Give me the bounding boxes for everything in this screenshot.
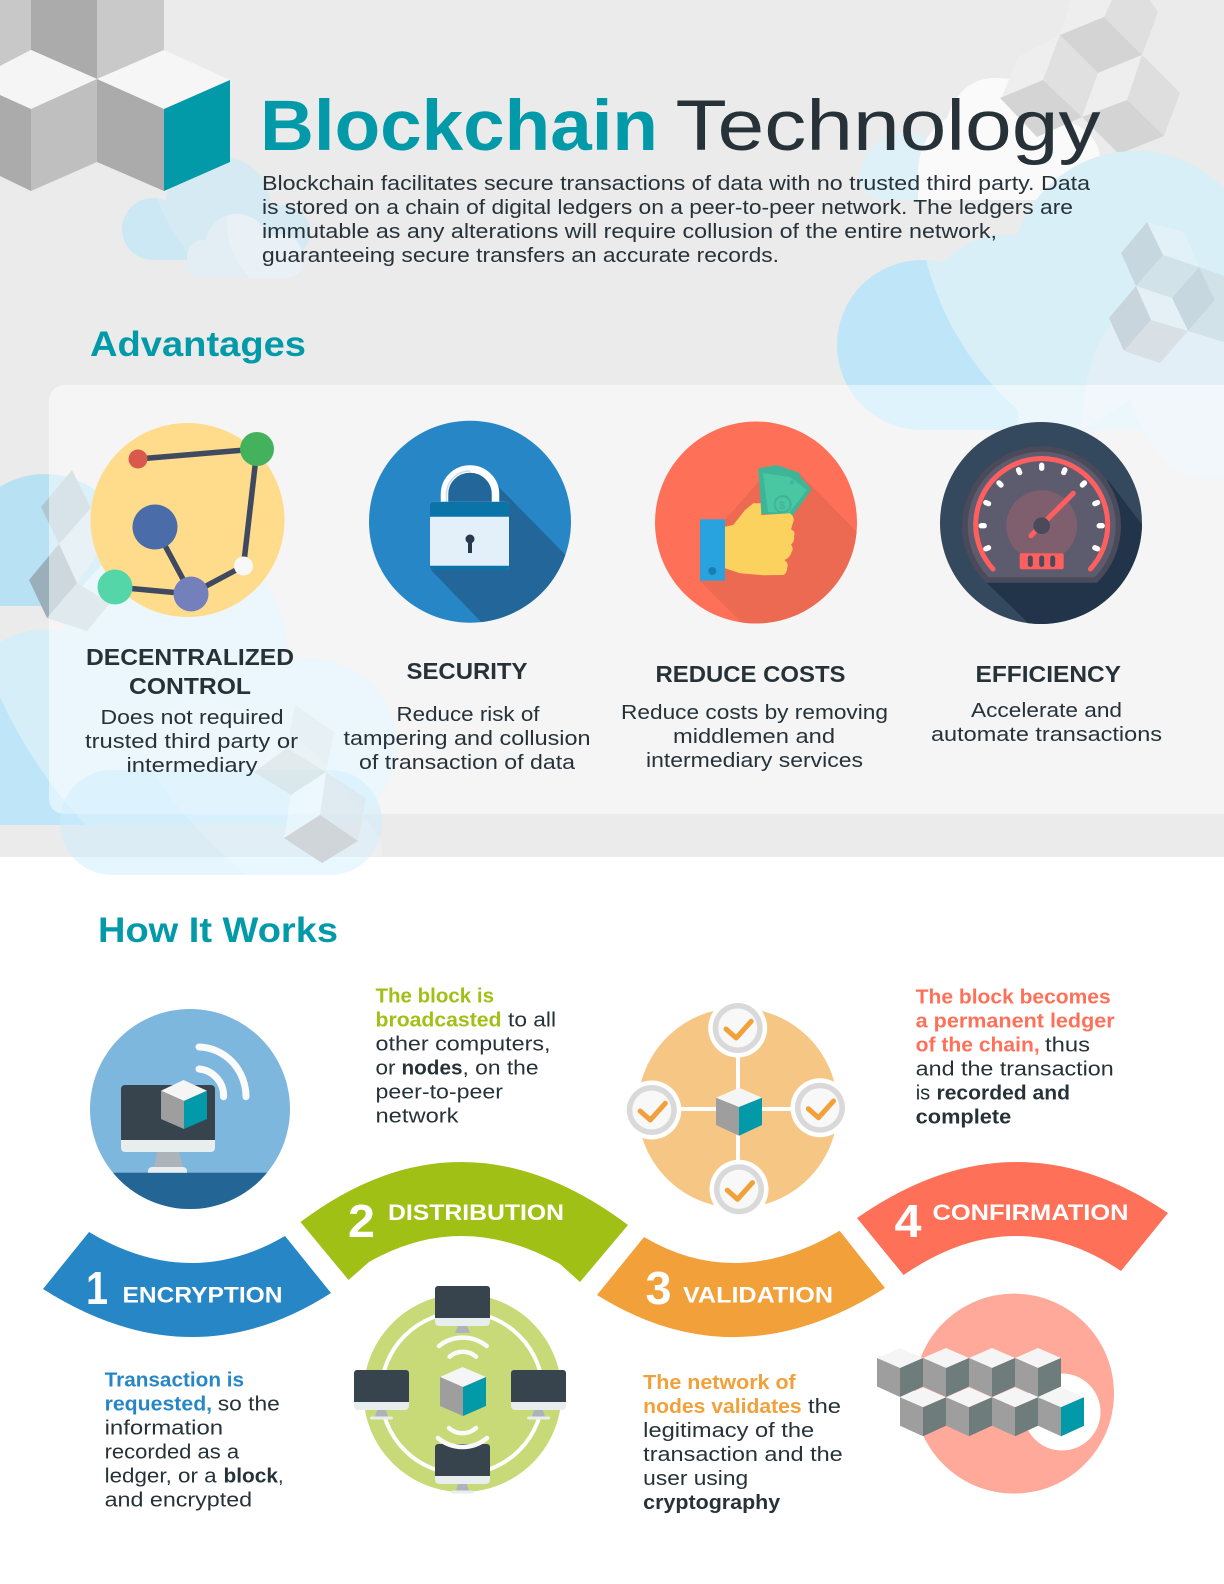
cubes: faint top right xyxy=(1000,0,1180,154)
card: security: of transaction of data xyxy=(359,752,576,774)
text: step 3 description xyxy=(643,1372,843,1514)
text: step 1 description: block xyxy=(224,1466,279,1488)
icon: hand holding money: $ xyxy=(779,500,785,512)
card: decentralized control: DECENTRALIZED xyxy=(86,644,294,670)
white lower section xyxy=(0,857,1224,1584)
intro text: is stored on a chain of digital ledgers on a peer-to-peer network. The ledgers are xyxy=(262,197,1073,219)
ribbon: step 1 encryption: ENCRYPTION xyxy=(122,1283,282,1308)
ribbon: step 1 encryption: 1 xyxy=(86,1262,108,1314)
card: security xyxy=(344,658,590,774)
text: step 2 description: nodes xyxy=(402,1058,462,1080)
card: efficiency: EFFICIENCY xyxy=(976,661,1121,687)
text: step 1 description: so the xyxy=(218,1394,280,1416)
text: step 2 description: broadcasted xyxy=(376,1010,502,1032)
icon: decentralized network xyxy=(90,423,284,617)
cloud: large top right xyxy=(830,140,1224,440)
card: decentralized control: intermediary xyxy=(126,755,258,777)
card: security: Reduce risk of xyxy=(396,704,540,726)
text: step 2 description: , on the xyxy=(462,1058,538,1080)
title xyxy=(260,87,1101,166)
ribbon: step 4 confirmation xyxy=(857,1162,1168,1275)
text: step 3 description: nodes validates xyxy=(643,1396,802,1418)
ribbon: step 4 confirmation: CONFIRMATION xyxy=(932,1200,1128,1225)
icon: chain of blocks xyxy=(877,1294,1114,1494)
card: decentralized control: CONTROL xyxy=(129,673,251,699)
title: Technology xyxy=(676,87,1101,166)
title: Blockchain xyxy=(260,87,658,166)
card: reduce costs: intermediary services xyxy=(646,750,863,772)
card: efficiency xyxy=(931,661,1162,746)
icon: padlock xyxy=(369,420,571,623)
text: step 4 description: recorded and xyxy=(936,1083,1070,1105)
text: step 4 description: The block becomes xyxy=(916,986,1111,1008)
panel: advantages background xyxy=(49,385,1224,814)
text: step 2 description xyxy=(376,986,556,1128)
card: reduce costs: Reduce costs by removing xyxy=(621,702,888,724)
ribbon: step 4 confirmation: 4 xyxy=(894,1195,922,1247)
text: step 2 description: The block is xyxy=(376,986,494,1008)
text: step 1 description: ledger, or a xyxy=(105,1466,218,1488)
text: step 1 description: information xyxy=(105,1418,223,1440)
text: step 4 description xyxy=(916,986,1115,1129)
text: step 1 description: recorded as a xyxy=(105,1442,240,1464)
card: reduce costs: middlemen and xyxy=(673,726,835,748)
text: step 1 description: requested, xyxy=(105,1394,212,1416)
card: decentralized control: Does not required xyxy=(100,707,284,729)
cloud: bottom, crossing into white section xyxy=(60,700,382,875)
card: efficiency: automate transactions xyxy=(931,724,1162,746)
card: decentralized control xyxy=(85,644,298,777)
text: step 1 description: , xyxy=(278,1466,284,1488)
ribbon: step 2 distribution xyxy=(300,1162,628,1282)
card: efficiency: Accelerate and xyxy=(971,700,1122,722)
cloud: behind title, right xyxy=(860,78,1100,200)
card: decentralized control: trusted third party or xyxy=(85,731,298,753)
cloud: lower right overlay xyxy=(1082,305,1224,478)
icon: validation checks xyxy=(622,998,850,1219)
text: step 4 description: thus xyxy=(1045,1035,1090,1057)
icon: distribution network xyxy=(354,1286,566,1494)
text: step 2 description: network xyxy=(376,1106,460,1128)
text: step 3 description: cryptography xyxy=(643,1492,781,1514)
ribbon: step 3 validation: VALIDATION xyxy=(683,1283,833,1308)
text: step 3 description: the xyxy=(808,1396,841,1418)
text: step 3 description: transaction and the xyxy=(643,1444,843,1466)
cloud: lower left xyxy=(0,474,410,830)
icon: encryption monitor xyxy=(90,1009,290,1209)
cloud: small, left of intro text xyxy=(122,158,310,278)
text: step 4 description: is xyxy=(916,1083,930,1105)
card: reduce costs: REDUCE COSTS xyxy=(656,661,846,687)
text: step 3 description: user using xyxy=(643,1468,748,1490)
text: step 3 description: legitimacy of the xyxy=(643,1420,814,1442)
ribbon: step 2 distribution: 2 xyxy=(348,1195,375,1247)
intro text: guaranteeing secure transfers an accurate records. xyxy=(262,245,779,267)
text: step 1 description xyxy=(105,1370,284,1512)
text: step 2 description: to all xyxy=(508,1010,556,1032)
text: step 4 description: a permanent ledger xyxy=(916,1010,1115,1032)
icon: speedometer xyxy=(940,422,1142,624)
cubes: faint bottom xyxy=(254,705,366,863)
text: step 4 description: of the chain, xyxy=(916,1035,1040,1057)
card: security: tampering and collusion xyxy=(344,728,590,750)
ribbon: step 2 distribution: DISTRIBUTION xyxy=(388,1200,564,1225)
cubes: faint lower left xyxy=(29,470,110,631)
ribbon: step 3 validation: 3 xyxy=(646,1262,672,1314)
cubes: faint right side xyxy=(1109,222,1224,363)
text: step 2 description: other computers, xyxy=(376,1034,550,1056)
text: step 1 description: and encrypted xyxy=(105,1490,252,1512)
text: step 3 description: The network of xyxy=(643,1372,796,1394)
background: grey header area xyxy=(0,0,1224,857)
intro text xyxy=(262,173,1091,267)
text: step 4 description: complete xyxy=(916,1107,1011,1129)
icon: hand holding money xyxy=(655,422,857,624)
text: step 2 description: peer-to-peer xyxy=(376,1082,503,1104)
heading: how it works: How It Works xyxy=(98,911,338,950)
card: reduce costs xyxy=(621,661,888,772)
ribbon: step 3 validation xyxy=(597,1231,885,1337)
intro text: immutable as any alterations will require collusion of the entire network, xyxy=(262,221,997,243)
ribbon: step 1 encryption xyxy=(43,1232,331,1337)
intro text: Blockchain facilitates secure transactions of data with no trusted third party. Data xyxy=(262,173,1091,195)
text: step 2 description: or xyxy=(376,1058,396,1080)
text: step 4 description: and the transaction xyxy=(916,1059,1114,1081)
heading: advantages: Advantages xyxy=(90,325,306,364)
cubes: top-left corner stack xyxy=(0,0,230,191)
card: security: SECURITY xyxy=(406,658,528,684)
text: step 1 description: Transaction is xyxy=(105,1370,244,1392)
